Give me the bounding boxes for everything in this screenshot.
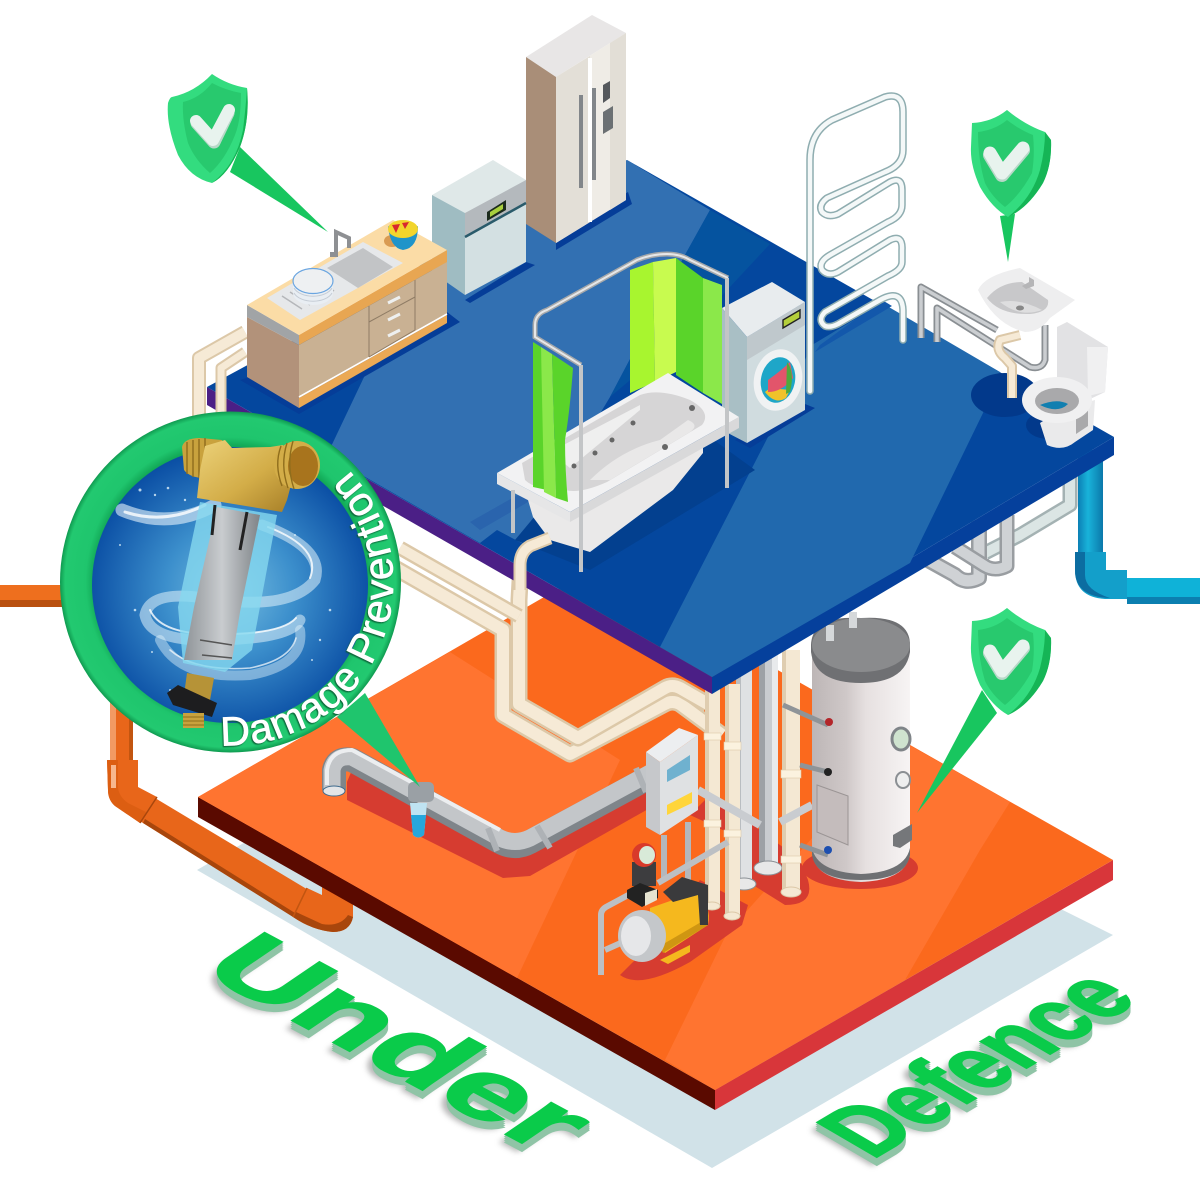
filter inset circle: Damage Prevention: [221, 472, 394, 748]
curved label: [221, 467, 393, 745]
refrigerator: [526, 15, 632, 250]
bathtub with shower curtain: [497, 254, 755, 572]
cream pipes under kitchen: [199, 332, 245, 420]
wash basin: [978, 268, 1075, 332]
filter inset circle: [60, 412, 420, 787]
icon: glass of water under filter tap: [408, 782, 434, 838]
water droplets: [119, 487, 331, 691]
cream bath drain elbow: [520, 538, 550, 590]
towel rail radiator: [810, 96, 903, 391]
panel: orange basement floor: [198, 567, 1113, 1110]
panel: blue upper floor: [207, 160, 1114, 694]
green ring: [60, 412, 401, 752]
inlet orange pipe on the left: [0, 585, 353, 932]
grey drain pipes below the upper floor: [928, 470, 1070, 581]
shield marker: water heater: [917, 608, 1051, 813]
vertical risers between floors: [698, 650, 812, 920]
heading word: Defence: Defence: [795, 955, 1159, 1171]
blue water disc: [92, 447, 368, 723]
callout pointer of the inset: [337, 693, 420, 787]
grey and cream pipes behind basin: [921, 287, 1045, 398]
ground shadow of the building: [197, 660, 1113, 1168]
water swirl: [122, 505, 316, 676]
filter housing: [178, 502, 277, 672]
drain valve: [167, 673, 217, 728]
washing machine: [722, 282, 815, 448]
cream supply pipes on the ground floor: [395, 545, 722, 754]
brass filter head: [182, 438, 320, 512]
water heater tank: [783, 612, 912, 882]
grey water main pipe with filter tap: [323, 750, 650, 851]
toilet: [1022, 322, 1108, 448]
heading word: Under: Under: [178, 915, 624, 1168]
shield marker: bathroom basin: [971, 110, 1051, 262]
pump with pressure gauge: [601, 842, 728, 975]
shield marker: kitchen: [168, 74, 328, 232]
fruit bowl: [384, 220, 418, 250]
outlet blue pipe on the right: [1075, 450, 1200, 604]
kitchen counter with sink: [240, 220, 460, 414]
dishwasher: [432, 160, 535, 303]
control box: [646, 728, 698, 880]
